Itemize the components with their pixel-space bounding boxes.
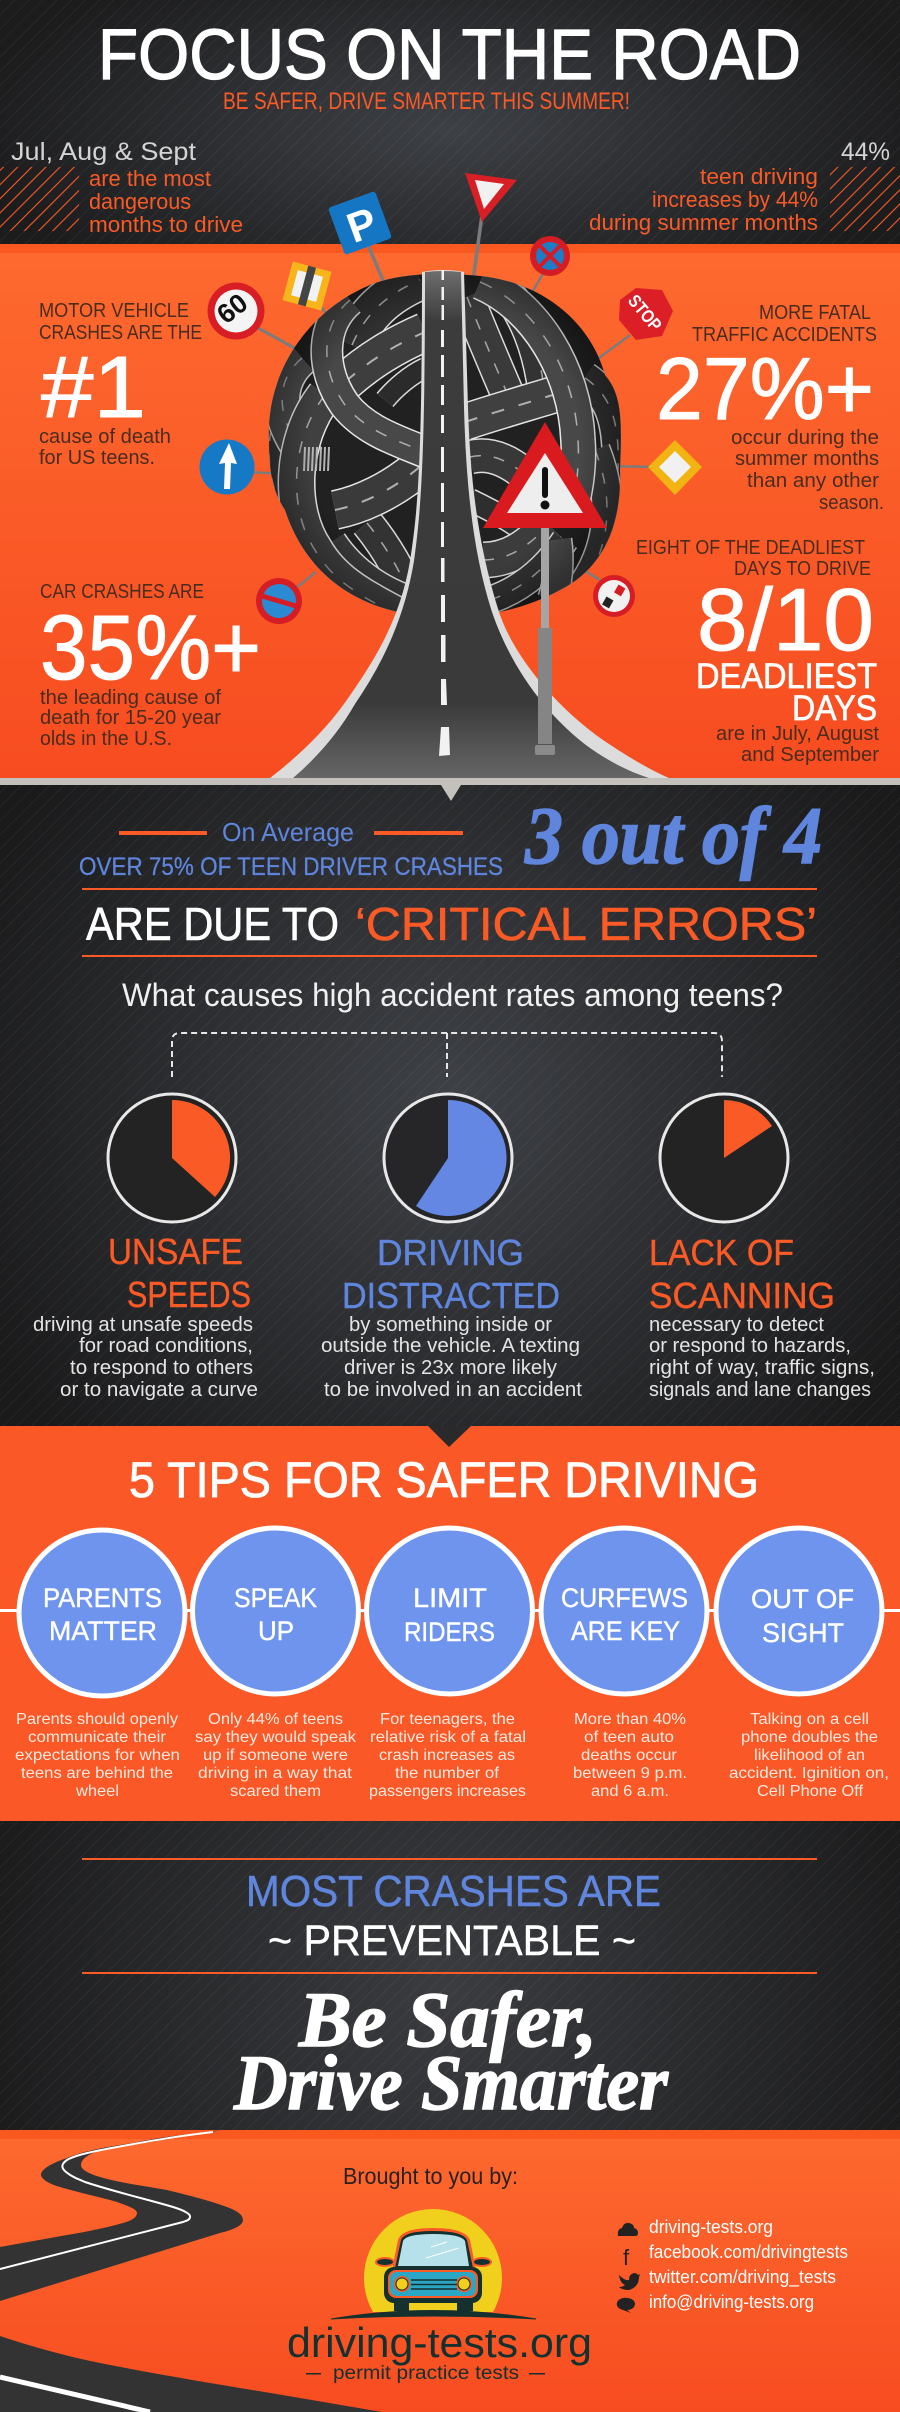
stat: 8/10 deadliest days: 8/10: [697, 570, 874, 669]
stat: 35%+: CAR CRASHES ARE: [40, 581, 204, 603]
sign: no stopping top: [530, 236, 570, 276]
tip: speak up: UP: [258, 1616, 294, 1646]
left header stat: Jul, Aug & Sept: [11, 138, 196, 166]
column: lack of scanning: LACK OF: [649, 1232, 794, 1273]
tip: speak up: scared them: [230, 1783, 321, 1800]
panel: most crashes are preventable: [0, 1821, 900, 2131]
panel: 5 tips: [0, 1426, 900, 1821]
stat: 27%+: 27%+: [656, 339, 874, 438]
tip: curfews are key: CURFEWS: [561, 1583, 688, 1613]
icon: chat: [617, 2298, 635, 2313]
left header stat: dangerous: [89, 189, 191, 214]
hatch decoration left: [0, 167, 79, 231]
stat: #1 cause of death: for US teens.: [39, 447, 155, 469]
tip: limit riders: LIMIT: [413, 1583, 487, 1613]
tip: limit riders: RIDERS: [404, 1617, 495, 1647]
column: driving distracted: DISTRACTED: [342, 1275, 560, 1316]
column: driving distracted: to be involved in an accident: [324, 1379, 582, 1401]
left header stat: months to drive: [89, 212, 243, 237]
tip: speak up: SPEAK: [234, 1583, 317, 1613]
pie: driving distracted: [384, 1094, 512, 1222]
stat: 35%+: the leading cause of: [40, 687, 221, 709]
logo wordmark: driving-tests.org: [287, 2319, 592, 2366]
most crashes heading: MOST CRASHES ARE: [246, 1867, 661, 1916]
sign: parking: [328, 191, 392, 256]
panel: critical errors: [0, 785, 900, 1426]
contact list: twitter.com/driving_tests: [649, 2267, 836, 2288]
stat: 8/10 deadliest days: DAYS TO DRIVE: [734, 558, 871, 580]
sign: yellow diamond: [648, 440, 702, 495]
stat: 27%+: season.: [819, 492, 884, 514]
right header stat: increases by 44%: [652, 187, 818, 212]
column: lack of scanning: necessary to detect: [649, 1314, 824, 1336]
tip: limit riders: passengers increases: [369, 1783, 526, 1800]
tip: speak up: up if someone were: [203, 1747, 348, 1764]
column: lack of scanning: SCANNING: [649, 1275, 835, 1316]
over 75 percent: OVER 75% OF TEEN DRIVER CRASHES: [79, 853, 503, 881]
stat: 27%+: TRAFFIC ACCIDENTS: [692, 324, 877, 346]
tip: out of sight: [716, 1528, 889, 1800]
tip: parents matter: Parents should openly: [16, 1711, 178, 1728]
sign: no overtaking: [593, 575, 635, 617]
column: unsafe speeds: UNSAFE: [108, 1231, 243, 1272]
sign: speed 60: 60: [211, 288, 253, 330]
tip: out of sight: phone doubles the: [741, 1729, 878, 1746]
tip: limit riders: [366, 1528, 532, 1800]
stat: #1 cause of death: [39, 300, 202, 469]
stat: 35%+: death for 15-20 year: [40, 707, 221, 729]
tip: curfews are key: and 6 a.m.: [591, 1783, 669, 1800]
logo: car: [330, 2209, 536, 2320]
tips heading: 5 TIPS FOR SAFER DRIVING: [129, 1452, 759, 1508]
sign: no entry: [256, 578, 302, 624]
brought to you by: Brought to you by:: [343, 2163, 518, 2189]
tip: speak up: driving in a way that: [198, 1765, 353, 1782]
left header stat: [0, 138, 243, 237]
subtitle: BE SAFER, DRIVE SMARTER THIS SUMMER!: [223, 88, 630, 115]
sign: yellow square: [283, 262, 331, 310]
tip: parents matter: MATTER: [49, 1616, 157, 1646]
preventable heading: ~ PREVENTABLE ~: [268, 1917, 636, 1965]
stat: 27%+: than any other: [747, 470, 879, 492]
tip: limit riders: relative risk of a fatal: [370, 1729, 526, 1746]
tip: curfews are key: between 9 p.m.: [573, 1765, 687, 1782]
column: driving distracted: DRIVING: [377, 1232, 524, 1273]
contact list: [617, 2217, 848, 2313]
pointer from stats panel: [441, 785, 461, 801]
contact list: info@driving-tests.org: [649, 2292, 814, 2312]
title: FOCUS ON THE ROAD: [98, 16, 801, 95]
tip: limit riders: the number of: [395, 1765, 500, 1782]
tip: parents matter: wheel: [75, 1783, 119, 1800]
column: unsafe speeds: to respond to others: [70, 1357, 253, 1379]
right header stat: [589, 138, 900, 235]
stat: #1 cause of death: #1: [41, 339, 146, 436]
right header stat: during summer months: [589, 210, 818, 235]
crosswalk: [304, 447, 329, 471]
slogan script: [233, 1976, 669, 2126]
dashed connector: [172, 1033, 722, 1077]
tip: limit riders: For teenagers, the: [380, 1711, 515, 1728]
stat: 8/10 deadliest days: [636, 537, 879, 766]
tip: speak up: [192, 1528, 358, 1800]
sign: stop: STOP: [624, 291, 666, 335]
question: What causes high accident rates among teens?: [122, 977, 783, 1013]
tip: speak up: Only 44% of teens: [208, 1711, 343, 1728]
stat: 8/10 deadliest days: DEADLIEST: [696, 657, 877, 696]
column: unsafe speeds: [33, 1094, 258, 1401]
on average line: [119, 817, 463, 847]
stat: 27%+: summer months: [735, 448, 879, 470]
stat: 27%+: MORE FATAL: [759, 302, 871, 324]
panel: footer: [0, 2130, 900, 2412]
tip: curfews are key: deaths occur: [581, 1747, 678, 1764]
logo tagline: permit practice tests: [333, 2363, 519, 2384]
tip: parents matter: expectations for when: [15, 1747, 180, 1764]
tip: parents matter: PARENTS: [43, 1583, 162, 1613]
tip: out of sight: SIGHT: [762, 1618, 844, 1648]
slogan script: Be Safer,: [298, 1976, 597, 2063]
column: unsafe speeds: driving at unsafe speeds: [33, 1314, 253, 1336]
column: unsafe speeds: SPEEDS: [127, 1274, 251, 1315]
stat: 8/10 deadliest days: EIGHT OF THE DEADLIEST: [636, 537, 865, 559]
tip: curfews are key: [541, 1528, 707, 1800]
pointer from dark panel: [428, 1426, 471, 1447]
column: driving distracted: by something inside or: [349, 1314, 552, 1336]
main road: [270, 270, 669, 778]
hatch decoration right: [830, 167, 900, 231]
column: driving distracted: outside the vehicle. A texting: [321, 1335, 580, 1357]
icon: twitter: [619, 2273, 640, 2290]
tip: curfews are key: of teen auto: [584, 1729, 674, 1746]
tip: limit riders: crash increases as: [379, 1747, 515, 1764]
section: header background: [0, 0, 900, 245]
stat: 8/10 deadliest days: DAYS: [792, 689, 877, 728]
stat: 35%+: [40, 581, 261, 750]
tip: out of sight: Cell Phone Off: [757, 1783, 864, 1800]
stat: 35%+: 35%+: [40, 597, 261, 699]
icon: facebook: f: [623, 2245, 630, 2270]
tip: parents matter: communicate their: [28, 1729, 167, 1746]
sign: warning triangle with pole: [483, 422, 607, 755]
tip: out of sight: likelihood of an: [754, 1747, 865, 1764]
column: lack of scanning: right of way, traffic signs,: [649, 1357, 875, 1379]
column: lack of scanning: signals and lane changes: [649, 1379, 871, 1401]
column: unsafe speeds: or to navigate a curve: [60, 1379, 258, 1401]
column: unsafe speeds: for road conditions,: [79, 1335, 253, 1357]
column: lack of scanning: or respond to hazards,: [649, 1335, 851, 1357]
stat: #1 cause of death: MOTOR VEHICLE: [39, 300, 189, 322]
tip: parents matter: [15, 1530, 185, 1800]
sign: up arrow: [200, 440, 254, 494]
road ball: [268, 274, 621, 612]
sign: parking: P: [341, 198, 383, 252]
stat: 8/10 deadliest days: are in July, August: [716, 723, 879, 745]
stat: 35%+: olds in the U.S.: [40, 728, 172, 750]
pie: lack of scanning: [660, 1094, 788, 1222]
tip: out of sight: Talking on a cell: [750, 1711, 869, 1728]
stat: 27%+: occur during the: [731, 427, 879, 449]
column: lack of scanning: [649, 1094, 875, 1401]
tip: curfews are key: More than 40%: [574, 1711, 686, 1728]
left header stat: are the most: [89, 166, 211, 191]
sign poles: [250, 215, 660, 588]
slogan script: Drive Smarter: [233, 2039, 669, 2126]
right header stat: teen driving: [700, 164, 818, 189]
3 out of 4 script: 3 out of 4: [524, 790, 822, 881]
right header stat: 44%: [841, 138, 890, 166]
tip: out of sight: OUT OF: [751, 1584, 854, 1614]
stat: #1 cause of death: CRASHES ARE THE: [39, 322, 202, 344]
on average line: On Average: [222, 817, 354, 847]
panel: statistics with road ball: [0, 173, 900, 786]
sign: yield: [465, 173, 517, 222]
contact list: driving-tests.org: [649, 2217, 773, 2237]
tip: parents matter: teens are behind the: [21, 1765, 173, 1782]
critical errors heading: ARE DUE TO: [86, 898, 339, 950]
stat: 8/10 deadliest days: and September: [741, 744, 879, 766]
column: driving distracted: [321, 1094, 582, 1401]
critical errors heading: ‘CRITICAL ERRORS’: [355, 898, 817, 950]
contact list: facebook.com/drivingtests: [649, 2242, 848, 2262]
winding road illustration: [0, 2130, 382, 2412]
column: driving distracted: driver is 23x more likely: [344, 1357, 557, 1379]
pie: unsafe speeds: [108, 1094, 236, 1222]
tip: curfews are key: ARE KEY: [571, 1616, 680, 1646]
stat: #1 cause of death: cause of death: [39, 426, 171, 448]
stat: 27%+: [656, 302, 884, 514]
critical errors heading: [82, 888, 817, 957]
tip: speak up: say they would speak: [195, 1729, 357, 1746]
sign: speed 60: [208, 282, 264, 340]
icon: cloud: [618, 2223, 638, 2236]
tip: out of sight: accident. Iginition on,: [729, 1765, 889, 1782]
